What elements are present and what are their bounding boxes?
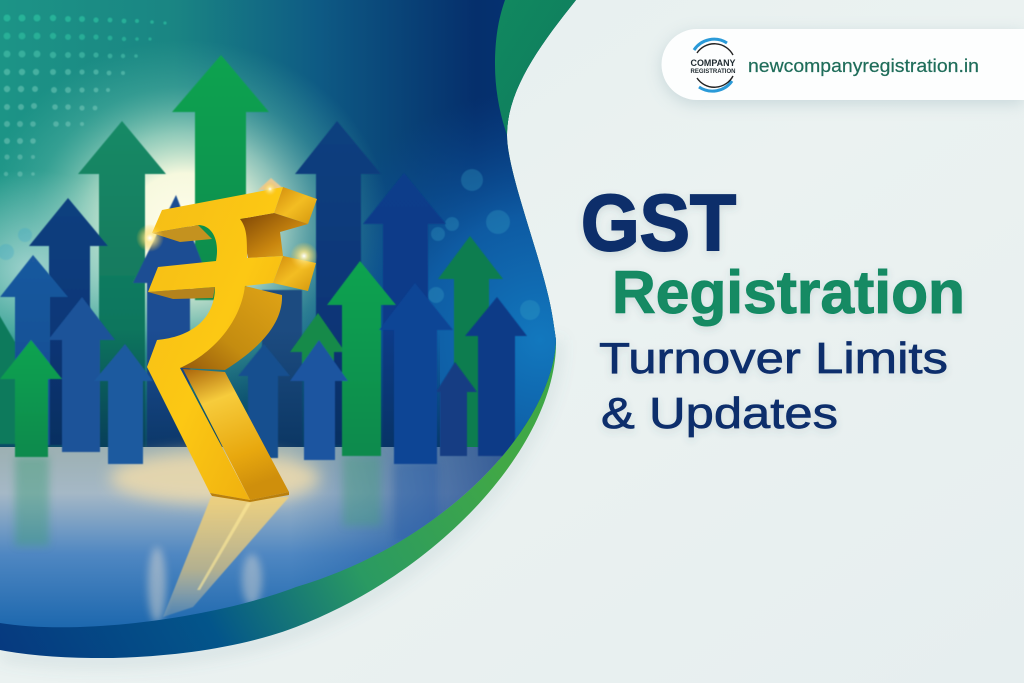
arrow: blue front right <box>379 283 453 464</box>
arrow: dark stem behind rupee <box>262 290 302 450</box>
rupee inner depth <box>240 213 308 258</box>
rupee leg side <box>183 369 289 500</box>
arrow: blue behind rupee <box>132 194 202 447</box>
logo word company: COMPANY <box>690 58 736 68</box>
arrow: green front left <box>0 340 62 457</box>
arrow: small blue centre <box>238 344 290 458</box>
dark shade at arrow bases <box>0 342 440 447</box>
arrow: navy left <box>29 198 108 445</box>
title block <box>581 178 965 438</box>
panel: rupee growth illustration <box>0 0 580 632</box>
arrow: blue small left <box>48 297 115 452</box>
arrow: blue left of rupee <box>94 344 153 464</box>
arrow: blue far left <box>0 255 68 445</box>
arrow reflections <box>15 456 438 623</box>
rupee top bar side <box>274 187 317 224</box>
arrow group: back row <box>29 55 503 458</box>
arrow: teal tall left <box>78 121 166 450</box>
arrow: green centre right <box>327 261 396 456</box>
logo word registration: REGISTRATION <box>690 69 736 75</box>
reflective floor <box>0 439 510 628</box>
halftone dots <box>4 14 167 177</box>
panel shadow <box>0 340 556 662</box>
arrow: navy small right <box>436 362 477 456</box>
rupee underside middle <box>148 287 215 299</box>
right blue wash <box>362 122 556 460</box>
subheading: Updates: & Updates <box>601 389 838 438</box>
heading: GST: GST <box>581 178 736 267</box>
central light glow <box>6 58 378 382</box>
logo outer arc <box>694 39 727 50</box>
arrow group: front row <box>0 255 527 464</box>
icon: company registration logo <box>690 39 736 91</box>
pill body <box>662 29 1024 100</box>
rupee front face <box>147 187 283 500</box>
arrow: partial green edge <box>0 306 15 444</box>
arrow: navy right <box>363 173 446 450</box>
bokeh lights <box>0 169 540 320</box>
logo lower arc <box>699 81 732 91</box>
logo inner arc <box>697 44 733 55</box>
flare: left <box>136 224 164 252</box>
website address: newcompanyregistration.in <box>748 56 979 76</box>
reflection highlight <box>197 503 251 590</box>
rupee base <box>210 492 289 502</box>
icon: gold rupee symbol <box>136 182 318 502</box>
rupee bowl side <box>180 286 282 370</box>
arrow: pale tip behind rupee <box>258 178 285 190</box>
arrow: small green behind <box>290 313 345 380</box>
top green swoosh <box>495 0 576 135</box>
floor surface <box>0 447 510 628</box>
arrow: blue front centre <box>290 340 348 460</box>
rupee reflection <box>163 497 289 617</box>
curved accent band <box>0 0 576 658</box>
flare: top <box>263 182 277 196</box>
arrow: deep blue front right <box>465 297 527 456</box>
floor right shade <box>304 447 510 574</box>
rupee middle bar side <box>273 256 316 291</box>
rupee underside upper <box>152 225 212 242</box>
sky background <box>0 0 580 460</box>
pill shadow <box>662 33 1024 104</box>
warm floor glow <box>110 452 320 504</box>
arrow: green far right <box>438 236 503 448</box>
flare: right <box>290 242 318 270</box>
logo inner lower arc <box>697 76 733 87</box>
arrow: tall green centre <box>172 55 269 300</box>
subheading: Turnover Limits: Turnover Limits <box>599 334 948 383</box>
arrow: dark blue tall right <box>295 121 381 445</box>
lower left haze <box>0 178 99 341</box>
heading: Registration: Registration <box>612 259 965 326</box>
website pill <box>662 29 1024 104</box>
